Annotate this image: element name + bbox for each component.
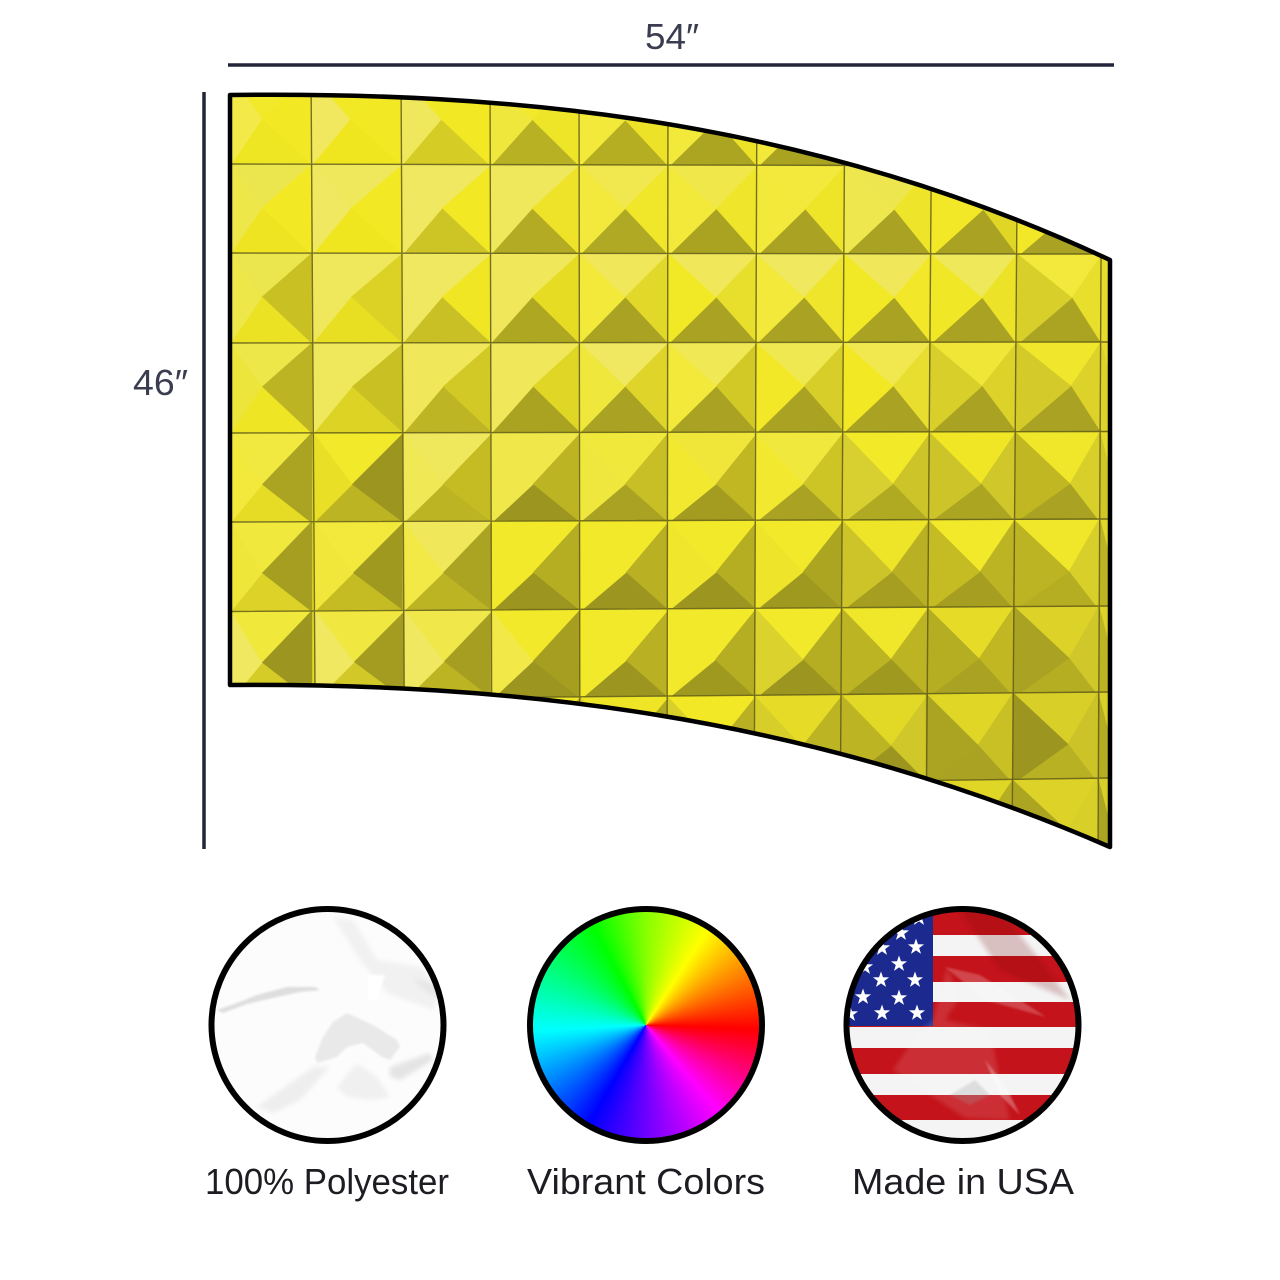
flag panel: yellow pyramid pattern swing flag xyxy=(225,70,1115,871)
diagram and badges canvas xyxy=(134,24,1114,1202)
width dimension label 54 inches: 54″ xyxy=(645,16,699,57)
pattern row 2 xyxy=(230,164,1114,257)
pattern row 6 xyxy=(230,519,1112,612)
icon: american flag xyxy=(840,905,1085,1145)
pattern row 1 xyxy=(232,97,844,165)
pattern row 7 xyxy=(230,606,1111,702)
pattern row 8 xyxy=(544,692,1108,784)
pattern row 5 xyxy=(230,432,1112,524)
height dimension label 46 inches: 46″ xyxy=(133,362,188,403)
icon: white polyester fabric xyxy=(212,909,444,1141)
width dimension line xyxy=(228,63,1114,67)
height dimension line xyxy=(202,92,206,849)
pattern row 3 xyxy=(230,253,1113,345)
pattern row 4 xyxy=(230,342,1113,434)
flag outline xyxy=(230,95,1110,847)
icon: colour wheel xyxy=(527,906,765,1144)
caption: 100% Polyester: 100% Polyester xyxy=(205,1161,449,1202)
caption: Vibrant Colors: Vibrant Colors xyxy=(527,1161,765,1202)
pattern row 9 xyxy=(941,778,1108,844)
caption: Made in USA: Made in USA xyxy=(852,1161,1074,1202)
